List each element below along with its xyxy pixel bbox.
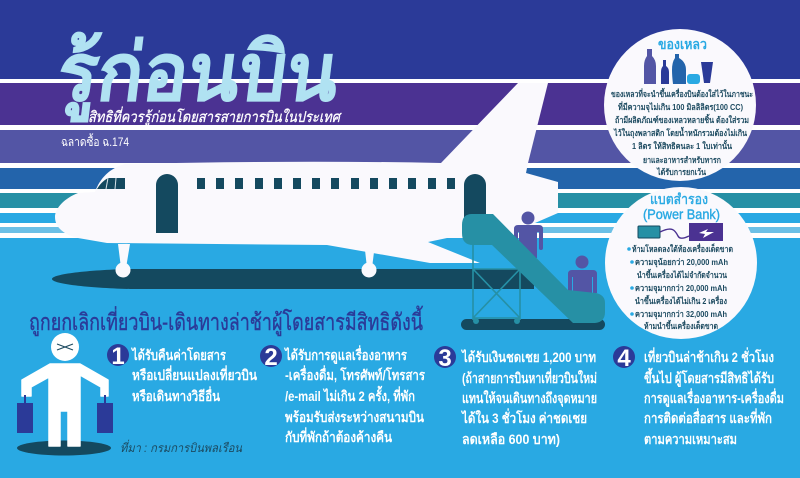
power bank text: ห้ามนำขึ้นเครื่องเด็ดขาด <box>644 319 718 331</box>
item 3: ได้รับเงินชดเชย 1,200 บาท <box>460 348 596 365</box>
section heading: ถูกยกเลิกเที่ยวบิน-เดินทางล่าช้าผู้โดยสารมีสิทธิดังนี้ <box>29 306 423 336</box>
item 2: พร้อมรับส่งระหว่างสนามบิน <box>285 409 424 425</box>
power bank text: ความจุมากกว่า 20,000 mAh <box>635 283 727 294</box>
icon: phone and power bank <box>638 223 723 241</box>
panel: power bank <box>605 187 757 339</box>
power bank text <box>632 242 733 331</box>
person on stairs top <box>514 212 543 258</box>
item 2 <box>260 344 425 445</box>
title: รู้ก่อนบิน <box>52 28 344 121</box>
source credit: ที่มา : กรมการบินพลเรือน <box>120 439 243 455</box>
item 3: 3 <box>438 345 452 372</box>
item 3 <box>434 345 597 447</box>
power bank heading <box>643 191 720 222</box>
boarding stairs <box>462 214 605 324</box>
item 4: การติดต่อสื่อสาร และที่พัก <box>644 408 772 426</box>
power bank heading: แบตสำรอง <box>650 191 708 207</box>
panel: liquids <box>604 29 756 181</box>
icon: passenger with bags <box>17 333 113 456</box>
item 2: -เครื่องดื่ม, โทรศัพท์/โทรสาร <box>285 365 425 383</box>
power bank bullets <box>627 247 634 316</box>
item 2: กับที่พักถ้าต้องค้างคืน <box>285 427 392 445</box>
liquids text: ของเหลวที่จะนำขึ้นเครื่องบินต้องใส่ไว้ในภาชนะ <box>611 87 753 99</box>
liquids text: 1 ลิตร ให้สิทธิคนละ 1 ใบเท่านั้น <box>632 139 732 151</box>
item 1: หรือเดินทางวิธีอื่น <box>132 386 220 404</box>
item 3: ได้ใน 3 ชั่วโมง ค่าชดเชย <box>460 408 587 426</box>
liquids text: ที่มีความจุไม่เกิน 100 มิลลิลิตร(100 CC) <box>618 100 743 113</box>
liquids text: ถ้ามีผลิตภัณฑ์ของเหลวหลายชิ้น ต้องใส่รวม <box>615 113 749 125</box>
power bank text: นำขึ้นเครื่องได้ไม่เกิน 2 เครื่อง <box>635 294 727 306</box>
item 2: 2 <box>264 344 278 371</box>
source issue: ฉลาดซื้อ ฉ.174 <box>61 133 129 149</box>
item 2: ได้รับการดูแลเรื่องอาหาร <box>283 345 407 364</box>
power bank text: ห้ามโหลดลงใต้ท้องเครื่องเด็ดขาด <box>632 242 733 254</box>
liquids text: ยาและอาหารสำหรับทารก <box>643 155 721 165</box>
item 2: /e-mail ไม่เกิน 2 ครั้ง, ที่พัก <box>285 385 415 404</box>
airplane <box>55 83 558 278</box>
item 3: (ถ้าสายการบินหาเที่ยวบินใหม่ <box>462 368 597 386</box>
icon: bottles <box>644 49 713 84</box>
item 1: ได้รับคืนค่าโดยสาร <box>130 346 226 363</box>
item 1: หรือเปลี่ยนแปลงเที่ยวบิน <box>132 365 257 383</box>
subtitle: สิทธิที่ควรรู้ก่อนโดยสารสายการบินในประเทศ <box>88 106 342 126</box>
liquids heading: ของเหลว <box>658 36 707 52</box>
item 4: 4 <box>617 345 631 372</box>
item 4: ตามความเหมาะสม <box>644 431 737 447</box>
item 4 <box>613 345 784 447</box>
liquids text: ไว้ในถุงพลาสติก โดยน้ำหนักรวมต้องไม่เกิน <box>613 126 747 139</box>
item 3: แทนให้จนเดินทางถึงจุดหมาย <box>462 389 597 407</box>
power bank heading: (Power Bank) <box>643 206 720 222</box>
power bank text: นำขึ้นเครื่องได้ไม่จำกัดจำนวน <box>637 268 727 280</box>
liquids text <box>611 87 753 177</box>
item 1: 1 <box>111 343 125 370</box>
power bank text: ความจุน้อยกว่า 20,000 mAh <box>635 257 728 268</box>
airplane shadow <box>52 269 534 289</box>
stairs shadow <box>461 319 605 330</box>
item 1 <box>107 343 257 404</box>
power bank text: ความจุมากกว่า 32,000 mAh <box>635 309 727 320</box>
person on stairs bottom <box>568 256 597 295</box>
item 3: ลดเหลือ 600 บาท) <box>462 431 560 447</box>
liquids text: ได้รับการยกเว้น <box>656 167 706 177</box>
